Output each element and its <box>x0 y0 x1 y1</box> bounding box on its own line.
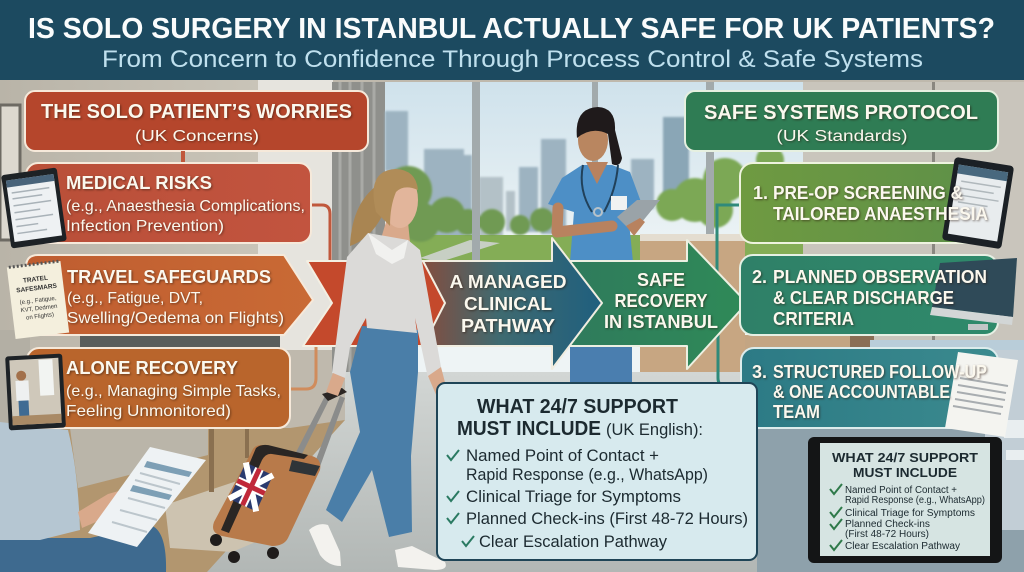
panel: safe systems protocol <box>685 91 998 151</box>
tablet: support checklist: Planned Check-ins <box>845 519 930 530</box>
text: structured follow-up and accountable team: STRUCTURED FOLLOW-UP <box>773 362 987 382</box>
panel: medical risks: (e.g., Anaesthesia Complications, <box>66 198 305 215</box>
panel: the solo patient's worries: (UK Concerns) <box>135 128 259 145</box>
icon: follow-up document <box>945 352 1018 437</box>
icon: union flag sticker <box>229 463 273 511</box>
text: planned observation and discharge criteria: & CLEAR DISCHARGE <box>773 288 954 308</box>
text: pre-op screening and tailored anaesthesia: 1. <box>753 183 768 203</box>
panel: alone recovery: (e.g., Managing Simple Tasks, <box>66 383 281 400</box>
panel: what 24/7 support must include: (UK English): <box>606 420 703 439</box>
arrow: safe recovery in Istanbul: SAFE <box>637 270 685 290</box>
illustration: suitcase with UK flag <box>210 388 347 563</box>
header banner <box>0 0 1024 80</box>
panel: alone recovery: ALONE RECOVERY <box>66 357 239 378</box>
panel: planned observation <box>740 255 998 335</box>
bed on right <box>870 340 1024 530</box>
arrow: a managed clinical pathway <box>415 238 602 369</box>
illustration: seated reader with document <box>0 422 206 572</box>
text: structured follow-up and accountable team: 3. <box>752 362 767 382</box>
tablet: support checklist: MUST INCLUDE <box>853 465 957 480</box>
panel: the solo patient's worries <box>25 91 368 151</box>
icon: travel safeguards notepad <box>7 261 69 339</box>
collar <box>368 233 408 264</box>
panel: what 24/7 support must include: Named Point of Contact + <box>466 446 659 465</box>
connector: medical risks to arrow <box>311 205 330 262</box>
trees <box>384 146 784 242</box>
document held by reader <box>88 447 206 547</box>
connector: alone recovery to arrow <box>290 344 316 389</box>
panel: pre-op screening <box>740 163 980 243</box>
text: structured follow-up and accountable team <box>752 362 987 422</box>
panel: medical risks: Infection Prevention) <box>66 218 224 235</box>
park lawn <box>385 235 805 265</box>
illustration: nurse with tablet <box>548 107 660 384</box>
panel: travel safeguards: TRAVEL SAFEGUARDS <box>67 266 271 287</box>
text: pre-op screening and tailored anaesthesia <box>753 183 988 224</box>
title: IS SOLO SURGERY IN ISTANBUL ACTUALLY SAFE FOR UK PATIENTS? <box>28 13 995 45</box>
arrow: red start chevron <box>303 261 445 346</box>
text: planned observation and discharge criteria: CRITERIA <box>773 309 854 329</box>
tablet: support checklist: Clinical Triage for Symptoms <box>845 508 975 519</box>
window frames <box>472 82 714 260</box>
panel: what 24/7 support must include: Clinical Triage for Symptoms <box>466 487 681 506</box>
arrow: a managed clinical pathway: PATHWAY <box>461 316 555 336</box>
connector: safe systems to right cards <box>717 205 741 388</box>
window view: sky and skyline <box>385 82 805 372</box>
panel: safe systems protocol: SAFE SYSTEMS PROTOCOL <box>704 102 978 124</box>
illustration: woman walking <box>309 169 447 570</box>
panel: safe systems protocol: (UK Standards) <box>776 128 908 145</box>
icon: computer monitor <box>930 258 1017 330</box>
text: planned observation and discharge criteria: 2. <box>752 267 767 287</box>
panel: travel safeguards: (e.g., Fatigue, DVT, <box>67 290 203 307</box>
panel: what 24/7 support must include: Planned Check-ins (First 48-72 Hours) <box>466 509 748 528</box>
text: structured follow-up and accountable team: TEAM <box>773 402 820 422</box>
panel: what 24/7 support must include: Rapid Response (e.g., WhatsApp) <box>466 465 708 484</box>
panel: what 24/7 support must include <box>437 383 757 560</box>
text: pre-op screening and tailored anaesthesia: PRE-OP SCREENING & <box>773 183 963 203</box>
arrow: safe recovery in Istanbul: IN ISTANBUL <box>604 312 718 332</box>
panel: medical risks: MEDICAL RISKS <box>66 172 212 193</box>
shirt <box>332 233 441 378</box>
panel: what 24/7 support must include: Clear Escalation Pathway <box>479 532 667 551</box>
hands <box>326 367 447 397</box>
shoes <box>309 524 446 570</box>
panel: travel safeguards <box>26 255 313 335</box>
arrow: a managed clinical pathway: CLINICAL <box>464 294 552 314</box>
icon: tablet with medical form <box>1 167 67 249</box>
connector: worries to medical risks <box>181 151 185 163</box>
icon: tablet with screening form <box>942 157 1014 249</box>
sofa <box>0 330 249 492</box>
right wall <box>803 82 1024 372</box>
tablet: support checklist: Rapid Response (e.g., WhatsApp) <box>845 495 985 506</box>
text: planned observation and discharge criteria <box>752 267 987 329</box>
icon: travel safeguards notepad: (e.g., Fatigue, <box>19 296 57 306</box>
jeans <box>326 326 418 537</box>
panel: medical risks <box>26 163 311 243</box>
tablet: support checklist: Clear Escalation Pathway <box>845 541 960 552</box>
curtain <box>332 82 385 372</box>
panel: alone recovery: Feeling Unmonitored) <box>66 403 231 420</box>
arrow: a managed clinical pathway: A MANAGED <box>450 272 566 292</box>
icon: travel safeguards notepad: on Flights) <box>26 312 54 322</box>
panel: what 24/7 support must include: WHAT 24/7 SUPPORT <box>477 396 678 418</box>
panel: the solo patient's worries: THE SOLO PATIENT’S WORRIES <box>41 101 352 123</box>
right floor <box>757 428 1024 572</box>
icon: travel safeguards notepad: KVT, Dedmen <box>20 304 58 314</box>
wood cabinet <box>640 234 874 383</box>
left lower room: floor and rug <box>0 420 345 572</box>
text: planned observation and discharge criteria: PLANNED OBSERVATION <box>773 267 987 287</box>
subtitle: From Concern to Confidence Through Process Control & Safe Systems <box>102 46 923 73</box>
panel: alone recovery <box>27 348 290 428</box>
icon: travel safeguards notepad: TRATEL <box>23 275 48 285</box>
panel: what 24/7 support must include: MUST INCLUDE <box>457 418 601 440</box>
arrow: safe recovery in Istanbul: RECOVERY <box>614 291 708 311</box>
arrow: safe recovery in Istanbul <box>560 240 747 369</box>
tablet: support checklist: Named Point of Contact + <box>845 485 957 496</box>
icon: tablet showing recovering patient <box>5 354 66 430</box>
panel: travel safeguards: Swelling/Oedema on Flights) <box>67 310 284 327</box>
icon: travel safeguards notepad: SAFESMARS <box>16 283 58 295</box>
ponytail <box>350 182 384 246</box>
tablet: support checklist: (First 48-72 Hours) <box>845 529 929 540</box>
text: pre-op screening and tailored anaesthesia: TAILORED ANAESTHESIA <box>773 204 988 224</box>
tablet: support checklist: WHAT 24/7 SUPPORT <box>832 450 978 465</box>
text: structured follow-up and accountable team: & ONE ACCOUNTABLE <box>773 382 950 402</box>
tablet: support checklist <box>808 437 1002 563</box>
panel: structured follow-up <box>741 348 998 428</box>
central floor <box>207 372 760 572</box>
